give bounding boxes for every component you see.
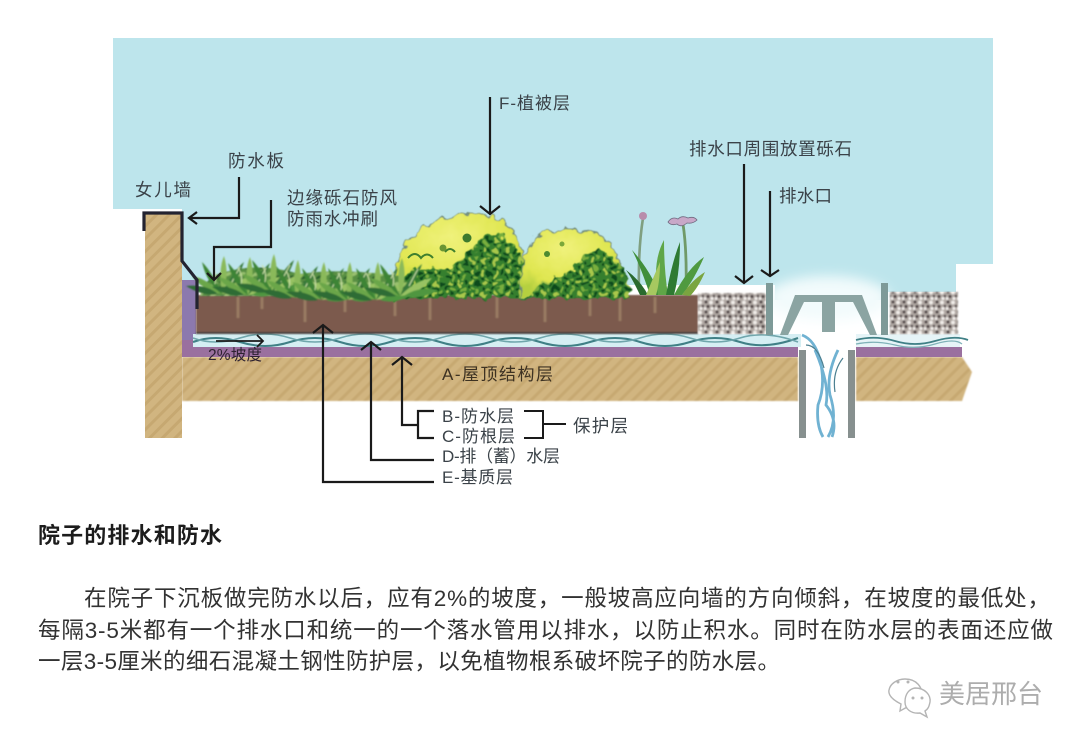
callout: F vegetation: F-植被层 — [499, 94, 570, 113]
shrub: small bush — [521, 229, 630, 298]
flashing: waterproof board — [144, 213, 197, 309]
label: parapet: 女儿墙 — [135, 180, 191, 200]
drain outlet — [766, 283, 888, 438]
watermark: 美居邢台 — [939, 679, 1043, 709]
callout: D drainage: D-排（蓄）水层 — [442, 447, 560, 466]
callout: edge gravel: 防雨水冲刷 — [287, 209, 378, 229]
A roof structure slab — [182, 357, 972, 401]
callout: waterproof board: 防水板 — [228, 151, 284, 171]
callout: gravel around outlet: 排水口周围放置砾石 — [689, 139, 852, 159]
callout: edge gravel: 边缘砾石防风 — [287, 188, 397, 208]
callout: E substrate — [313, 325, 513, 487]
E substrate soil layer — [196, 295, 698, 334]
D drainage layer — [193, 334, 968, 347]
callout: B and C layers: B-防水层 — [442, 407, 514, 426]
sky background — [113, 38, 993, 320]
callout: gravel around outlet — [689, 139, 852, 283]
F vegetation layer — [186, 212, 705, 302]
heading: 院子的排水和防水 — [38, 523, 222, 548]
bracket: protective layer — [524, 411, 628, 438]
body paragraph — [38, 586, 1053, 674]
callout: edge gravel — [207, 188, 397, 280]
callout: F vegetation — [480, 94, 570, 214]
body paragraph: 在院子下沉板做完防水以后，应有2%的坡度，一般坡高应向墙的方向倾斜，在坡度的最低处， — [84, 586, 1050, 611]
callout: outlet: 排水口 — [779, 186, 832, 206]
label: slope with arrow — [208, 335, 263, 364]
callout: outlet — [761, 186, 832, 276]
bracket: protective layer: 保护层 — [573, 416, 628, 436]
low leafy plants along the edge — [186, 254, 438, 302]
body paragraph: 每隔3-5米都有一个排水口和统一的一个落水管用以排水，以防止积水。同时在防水层的表面还应做 — [38, 618, 1053, 643]
callout: B and C layers: C-防根层 — [442, 427, 515, 446]
icon: chat bubbles — [889, 679, 930, 717]
watermark — [889, 679, 1043, 717]
shrub: large bush — [388, 213, 532, 298]
flowering grasses — [626, 212, 705, 296]
callout: E substrate: E-基质层 — [442, 468, 513, 487]
gravel around drain — [698, 292, 958, 334]
body paragraph: 一层3-5厘米的细石混凝土钢性防护层，以免植物根系破坏院子的防水层。 — [38, 649, 780, 674]
label: slope with arrow: 2%坡度 — [208, 346, 262, 364]
parapet wall — [145, 213, 182, 438]
B C waterproof and root barrier layers — [182, 280, 962, 357]
label: A roof structure: A-屋顶结构层 — [442, 365, 553, 384]
callout: B and C layers — [392, 357, 515, 446]
callout: waterproof board — [189, 151, 284, 224]
callout: D drainage — [361, 342, 560, 466]
